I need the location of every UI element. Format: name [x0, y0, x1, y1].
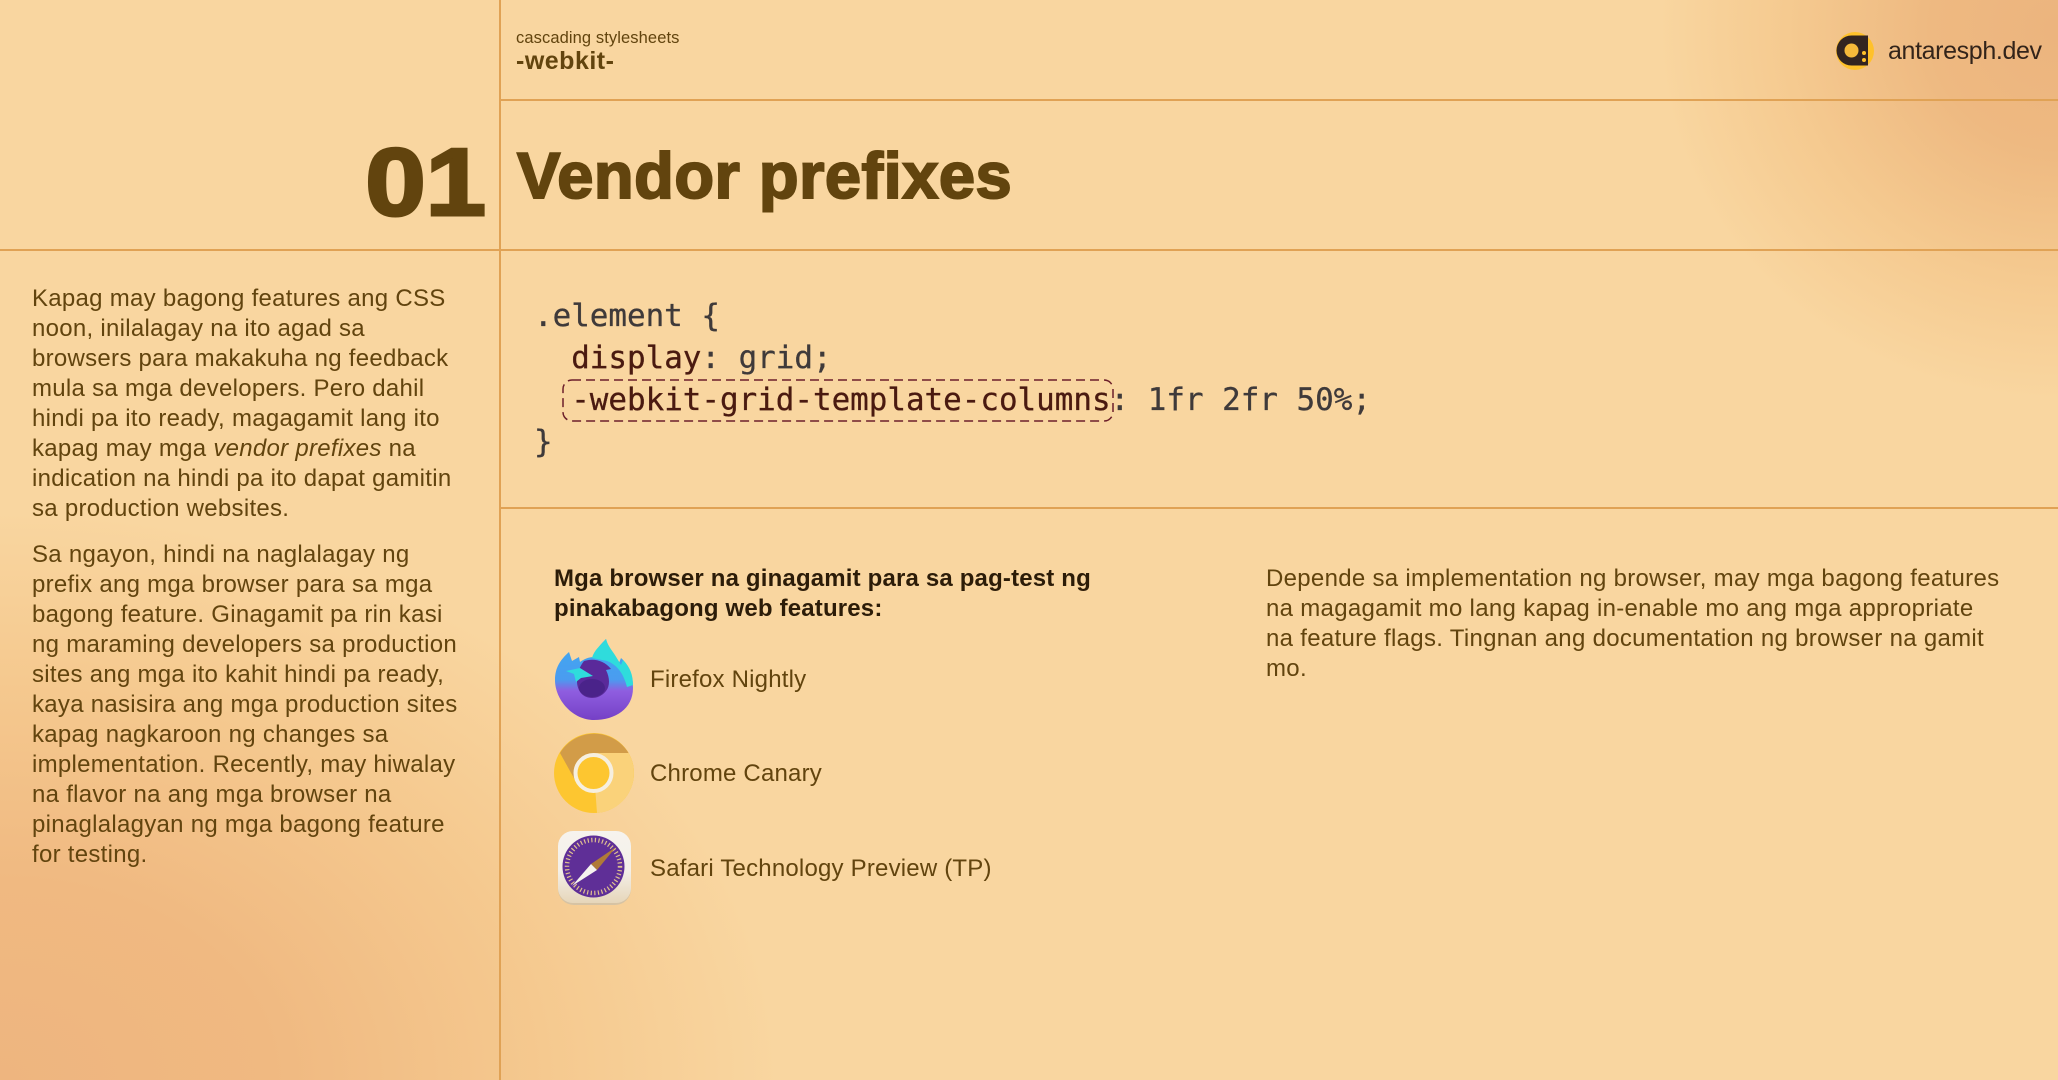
- header label: [516, 29, 680, 75]
- icon: firefox nightly: [555, 639, 633, 720]
- right note: na feature flags. Tingnan ang documentation ng browser na gamit: [1266, 625, 1984, 652]
- code block: display: grid;: [571, 340, 832, 376]
- paragraph 2: bagong feature. Ginagamit pa rin kasi: [32, 601, 443, 628]
- title: Vendor prefixes: [517, 139, 1012, 212]
- browser list heading: Mga browser na ginagamit para sa pag-test ng: [554, 565, 1091, 592]
- right note: na magagamit mo lang kapag in-enable mo ang mga appropriate: [1266, 595, 1973, 622]
- code block: [534, 298, 1371, 460]
- browser list heading: pinakabagong web features:: [554, 595, 882, 622]
- header label: -webkit-: [516, 47, 614, 75]
- code block: .element {: [534, 298, 720, 334]
- site name: antaresph.dev: [1888, 37, 2042, 65]
- paragraph 2: pinaglalagyan ng mga bagong feature: [32, 811, 445, 838]
- icon: antaresph logo: [1836, 32, 1874, 70]
- paragraph 2: kaya nasisira ang mga production sites: [32, 691, 458, 718]
- label: Firefox Nightly: [650, 666, 806, 693]
- paragraph 1: sa production websites.: [32, 495, 289, 522]
- logo: [1836, 32, 2042, 70]
- paragraph 2: [32, 541, 458, 868]
- paragraph 1: mula sa mga developers. Pero dahil: [32, 375, 424, 402]
- paragraph 2: sites ang mga ito kahit hindi pa ready,: [32, 661, 444, 688]
- paragraph 1: [32, 285, 451, 522]
- paragraph 1: hindi pa ito ready, magagamit lang ito: [32, 405, 440, 432]
- browser: chrome: [554, 733, 822, 813]
- browser list heading: [554, 565, 1091, 622]
- icon: safari technology preview: [558, 831, 631, 905]
- paragraph 2: ng maraming developers sa production: [32, 631, 457, 658]
- paragraph 2: for testing.: [32, 841, 147, 868]
- section number: 01: [365, 129, 486, 236]
- paragraph 1: noon, inilalagay na ito agad sa: [32, 315, 365, 342]
- icon: chrome canary: [554, 733, 634, 813]
- paragraph 2: na flavor na ang mga browser na: [32, 781, 392, 808]
- paragraph 2: prefix ang mga browser para sa mga: [32, 571, 432, 598]
- paragraph 1: browsers para makakuha ng feedback: [32, 345, 448, 372]
- header label: cascading stylesheets: [516, 29, 680, 47]
- paragraph 1: indication na hindi pa ito dapat gamitin: [32, 465, 451, 492]
- paragraph 2: Sa ngayon, hindi na naglalagay ng: [32, 541, 410, 568]
- browser: safari: [558, 831, 992, 905]
- paragraph 2: kapag nagkaroon ng changes sa: [32, 721, 388, 748]
- paragraph 1: Kapag may bagong features ang CSS: [32, 285, 446, 312]
- right note: [1266, 565, 1999, 682]
- browser: firefox: [555, 639, 806, 720]
- paragraph 2: implementation. Recently, may hiwalay: [32, 751, 455, 778]
- code block: }: [534, 424, 553, 460]
- label: Chrome Canary: [650, 760, 822, 787]
- dashed highlight: [562, 379, 1114, 422]
- right note: Depende sa implementation ng browser, may mga bagong features: [1266, 565, 1999, 592]
- left column text: [32, 285, 458, 868]
- label: Safari Technology Preview (TP): [650, 855, 992, 882]
- code block: -webkit-grid-template-columns: 1fr 2fr 50%;: [571, 382, 1371, 418]
- paragraph 1: kapag may mga vendor prefixes na: [32, 435, 416, 462]
- right note: mo.: [1266, 655, 1307, 682]
